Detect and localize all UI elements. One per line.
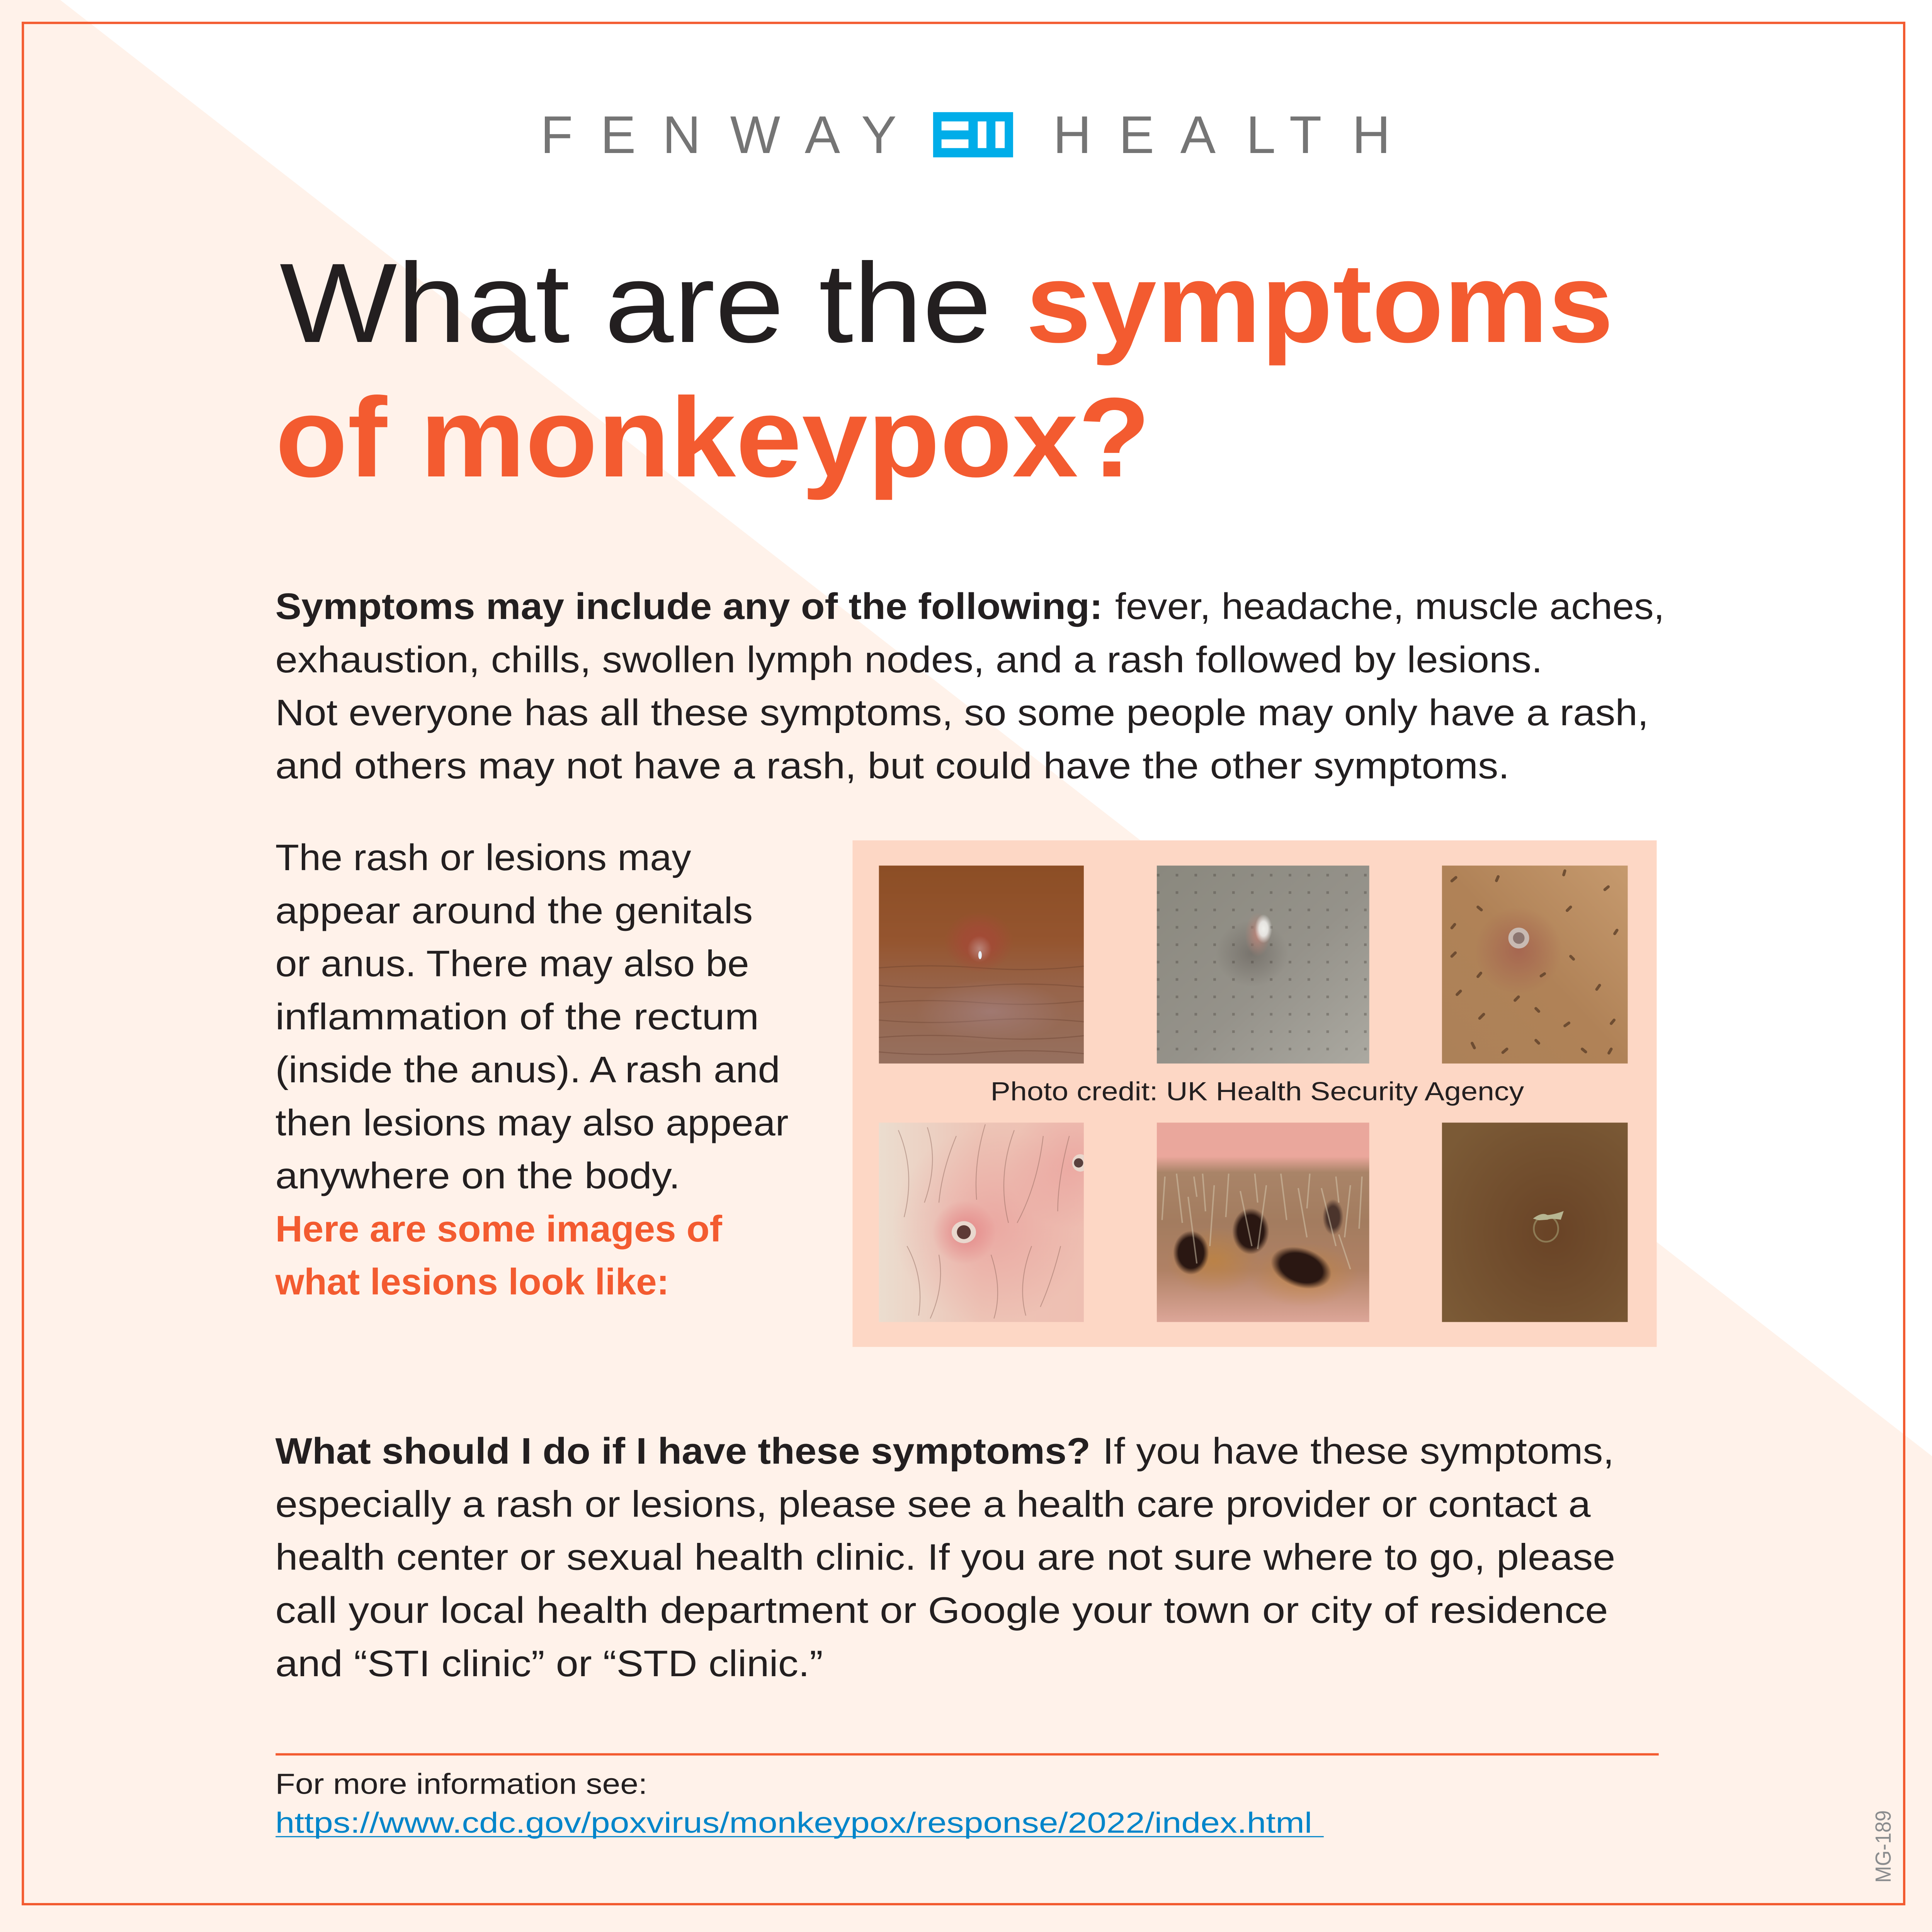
rash description text: then lesions may also appear <box>275 1102 789 1143</box>
what to do paragraph <box>275 1430 1615 1684</box>
panel: lesion photos <box>852 840 1657 1347</box>
logo icon: blue square <box>933 112 1013 157</box>
divider rule <box>276 1753 1659 1755</box>
intro paragraph: exhaustion, chills, swollen lymph nodes, and a rash followed by lesions. <box>275 639 1543 680</box>
link: CDC URL: https://www.cdc.gov/poxvirus/monkeypox/response/2022/index.html <box>275 1806 1312 1839</box>
footer: more information: For more information see: <box>275 1767 647 1800</box>
photo: lesion 3, tan skin <box>1442 866 1628 1063</box>
title: symptoms <box>1026 240 1614 367</box>
intro paragraph: and others may not have a rash, but could have the other symptoms. <box>275 745 1510 786</box>
intro paragraph: fever, headache, muscle aches, <box>1115 586 1665 627</box>
footer: more information <box>275 1767 1324 1839</box>
rash description text <box>275 837 789 1303</box>
rash description text: appear around the genitals <box>275 890 753 931</box>
what to do paragraph: especially a rash or lesions, please see a health care provider or contact a <box>275 1483 1591 1525</box>
logo: Fenway Health <box>541 105 1390 165</box>
photo: lesion 6, dark brown skin with crust <box>1442 1122 1628 1322</box>
title: What are the <box>280 240 992 366</box>
intro paragraph: Not everyone has all these symptoms, so some people may only have a rash, <box>275 692 1649 733</box>
rash description text: The rash or lesions may <box>275 837 691 878</box>
photo: lesion 2, grey skin <box>1157 866 1369 1063</box>
what to do paragraph: call your local health department or Google your town or city of residence <box>275 1590 1608 1631</box>
rash description text: what lesions look like: <box>275 1261 669 1303</box>
photo: lesion 1, brown skin <box>879 866 1084 1063</box>
photo: lesion 4, pale skin with hair <box>879 1122 1084 1322</box>
title: of monkeypox? <box>275 374 1150 501</box>
logo wordmark: FENWAY: FENWAY <box>541 105 896 165</box>
what to do paragraph: health center or sexual health clinic. If you are not sure where to go, please <box>275 1537 1615 1578</box>
intro paragraph: Symptoms may include any of the following: <box>275 586 1103 627</box>
logo wordmark: HEALTH: HEALTH <box>1053 105 1390 165</box>
rash description text: (inside the anus). A rash and <box>275 1049 780 1090</box>
title <box>275 240 1614 501</box>
intro paragraph <box>275 586 1665 786</box>
photo credit caption: Photo credit: UK Health Security Agency <box>990 1077 1524 1106</box>
rash description text: anywhere on the body. <box>275 1155 680 1197</box>
rash description text: Here are some images of <box>275 1208 723 1250</box>
what to do paragraph: What should I do if I have these symptoms? <box>275 1430 1090 1472</box>
what to do paragraph: If you have these symptoms, <box>1103 1430 1614 1472</box>
rash description text: inflammation of the rectum <box>275 996 759 1037</box>
document code: MG-189: MG-189 <box>1871 1810 1896 1883</box>
photo: lesion 5, dark lesions <box>1157 1122 1369 1322</box>
what to do paragraph: and “STI clinic” or “STD clinic.” <box>275 1643 823 1684</box>
rash description text: or anus. There may also be <box>275 943 749 985</box>
